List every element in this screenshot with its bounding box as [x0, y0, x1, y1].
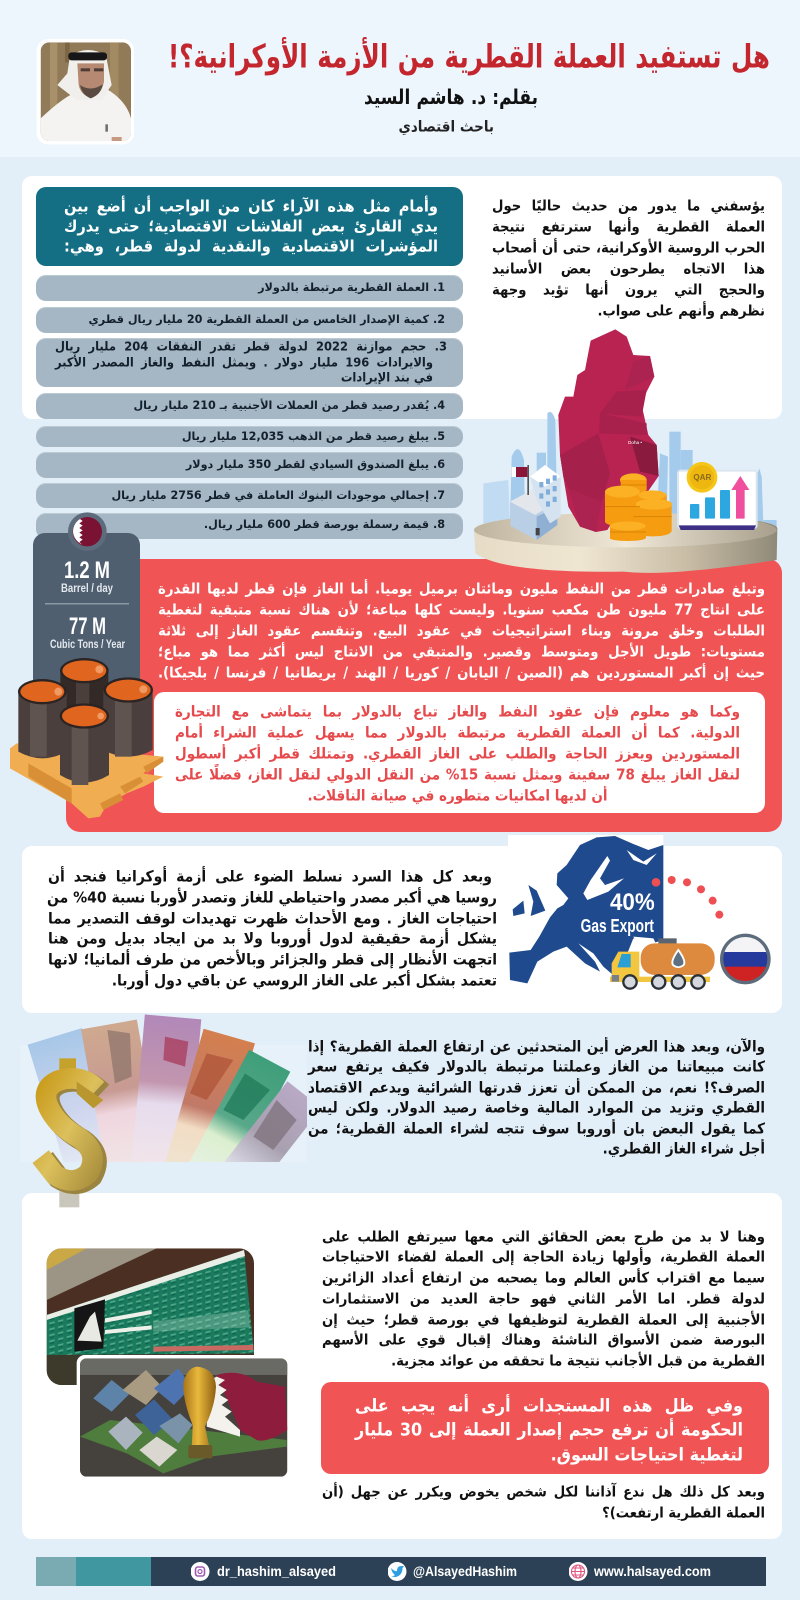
intro paragraph: يؤسفني ما يدور من حديث حاليًا حول	[492, 198, 765, 215]
stats column	[33, 533, 140, 748]
recommendation text: الحكومة أن ترفع حجم إصدار العملة إلى 30 مليار	[355, 1419, 743, 1440]
currency paragraph: القطري وتزيد من الموارد المالية وخاصة رصيد الدولار. ولكن ليس	[308, 1099, 765, 1117]
Europe paragraph: وبعد كل هذا السرد نسلط الضوء على أزمة أوكرانيا فنجد أن	[48, 868, 492, 886]
currency paragraph: كما يقول البعض بان أوروبا سوف تتجه لشراء العملة القطرية؛ من	[308, 1120, 765, 1138]
instagram handle	[191, 1562, 336, 1581]
currency paragraph: أجل شراء الغاز القطري.	[603, 1141, 765, 1158]
item 3 text	[54, 338, 447, 385]
illustration: banknote fan and dollar sign	[28, 1014, 307, 1208]
callout text	[64, 196, 438, 256]
illustration: Europe map, tanker and Russia flag	[508, 835, 771, 990]
item 4	[36, 393, 463, 419]
item 3	[36, 338, 463, 387]
photos: stock exchange board and World Cup	[46, 1248, 288, 1477]
closing question: وبعد كل ذلك هل ندع آذاننا لكل شخص يخوض ويكرر عن جهل (أن	[322, 1484, 765, 1501]
illustration: oil barrels on pallet	[10, 658, 164, 818]
item 6	[36, 452, 463, 478]
illustration: Qatar map on platform: Doha •	[628, 440, 642, 445]
stat: barrels per day	[61, 557, 113, 595]
exports paragraph	[158, 579, 765, 682]
illustration: Qatar map on platform: QAR	[693, 473, 712, 482]
portrait of the author	[36, 39, 134, 144]
intro paragraph: هذا الاتجاه يطرحون بعض الأسانيد	[492, 261, 765, 278]
currency paragraph: والآن، وبعد هذا العرض أين المتحدثين عن ارتفاع العملة القطرية؟ إذا	[308, 1038, 765, 1055]
facts paragraph: لدولة قطر. اما الأمر الثاني فهو حاجة العديد من الاستثمارات	[322, 1291, 765, 1308]
item 2	[36, 307, 463, 333]
exports paragraph: الطلبات وخلق مرونة وبناء استراتيجيات في عقود البيع. وتنقسم عقود الغاز إلى ثلاثة	[158, 623, 765, 639]
facts paragraph: سيما مع اقتراب كأس العالم وما يصحبه من ارتفاع أعداد الزائرين	[322, 1270, 765, 1287]
facts paragraph: القطرية من قبل الأجانب نتيجة ما تحققه من عوائد مجزية.	[391, 1353, 765, 1370]
currency paragraph: كانت مبيعاتنا من الغاز وعملتنا مرتبطة بالدولار فكيف يرتفع سعر	[308, 1058, 765, 1076]
twitter handle	[388, 1562, 517, 1581]
author byline: بقلم: د. هاشم السيد	[364, 86, 538, 110]
facts paragraph	[322, 1229, 765, 1370]
item 3 text: والايرادات 196 مليار دولار . ويمثل النفط والغاز المصدر الأكبر	[55, 354, 433, 369]
icon: Qatar flag circle	[68, 512, 107, 551]
header background	[0, 0, 800, 157]
item 5	[36, 426, 463, 447]
stat: barrels per day: 1.2 M	[64, 557, 110, 584]
illustration: Europe map, tanker and Russia flag: 40%	[610, 889, 655, 916]
facts paragraph: الأجنبية إلى العملة القطرية لتوظيفها في بورصة قطر؛ حيث إن	[322, 1312, 765, 1328]
intro paragraph: الحرب الروسية الأوكرانية، حتى أن أصحاب	[492, 240, 765, 257]
list of economic indicators	[36, 275, 463, 539]
item 3 text: 3. حجم موازنة 2022 لدولة قطر تقدر النفقات 204 مليار ريال	[55, 338, 447, 354]
instagram handle: dr_hashim_alsayed	[217, 1563, 336, 1579]
stat: barrels per day: Barrel / day	[61, 581, 113, 595]
item 1: 1. العملة القطرية مرتبطة بالدولار	[258, 281, 445, 294]
white contracts box	[154, 692, 765, 813]
title: هل تستفيد العملة القطرية من الأزمة الأوكرانية؟!	[168, 37, 770, 75]
item 6: 6. يبلغ الصندوق السيادي لقطر 350 مليار دولار	[186, 458, 445, 471]
Europe paragraph: روسيا هي أكبر مصدر واحتياطي للغاز وتصدر لأوربا نسبة 40% من	[47, 889, 497, 907]
callout text: يدي القارئ بعض الفلاشات الاقتصادية؛ حتى يدرك	[64, 217, 438, 236]
intro paragraph	[492, 198, 765, 320]
Europe paragraph: اتجهت الأنظار إلى قطر والجزائر وبالأخص من طرف ألمانيا؛ لانها	[48, 951, 497, 969]
panel: Europe gas crisis	[22, 846, 782, 1013]
Europe paragraph: تعتمد بشكل أكبر على الغاز الروسي عن باقي دول أوربا.	[112, 972, 497, 990]
contracts text: أن لديها امكانيات متطوره في صيانة الناقلات.	[307, 787, 608, 805]
recommendation text	[354, 1394, 743, 1465]
item 2: 2. كمية الإصدار الخامس من العملة القطرية 20 مليار ريال قطري	[88, 313, 445, 326]
illustration: Qatar map on platform	[474, 329, 778, 573]
author role: باحث اقتصادي	[398, 118, 494, 136]
item 7	[36, 483, 463, 508]
footer colour blocks	[36, 1557, 151, 1586]
intro paragraph: نظرهم وأنهم على صواب.	[597, 303, 765, 320]
footer bar	[36, 1557, 766, 1586]
contracts text: لنقل الغاز يبلغ 78 سفينة ويمثل نسبة 15% من النقل الدولي لنقل الغاز، فضلًا على	[175, 766, 740, 784]
facts paragraph: البورصة ضمن الأسواق الناشئة وهناك إقبال قوي على الأسهم	[322, 1333, 765, 1349]
exports paragraph: وتبلغ صادرات قطر من النفط مليون ومائتان برميل يوميا. أما الغاز فإن قطر لديها القدرة	[158, 581, 765, 598]
intro paragraph: العملة القطرية وأنها سترتفع نتيجة	[492, 219, 765, 236]
contracts text: وكما هو معلوم فإن عقود النفط والغاز تباع بالدولار بما يتماشى مع التجارة	[175, 703, 740, 721]
contracts text	[175, 703, 740, 805]
item 1	[36, 275, 463, 301]
item 5: 5. يبلغ رصيد قطر من الذهب 12,035 مليار ريال	[182, 430, 445, 443]
currency paragraph	[307, 1037, 765, 1158]
item 8: 8. قيمة رسملة بورصة قطر 600 مليار ريال.	[204, 518, 445, 531]
closing question: العملة القطرية ارتفعت)؟	[602, 1505, 765, 1521]
exports paragraph: على انتاج 77 مليون طن مكعب سنويا. وليست كلها مباعة؛ لأن هناك نسبة متبقية لتغطية	[158, 602, 765, 619]
Europe paragraph: يشكل أزمة حقيقية لدول أوروبا ولا بد من ايجاد بديل ومن هنا	[48, 931, 497, 948]
Europe paragraph: احتياجات الغاز . ومع الأحداث ظهرت تهديدات لوقف التصدير مما	[48, 910, 497, 927]
exports paragraph: مستويات: طويل الأجل ومتوسط وقصير. والمتبقي من الانتاج ليس أكثر مما هو مباع؛	[158, 644, 765, 660]
stat: cubic tons per year	[45, 603, 129, 651]
item 4: 4. يُقدر رصيد قطر من العملات الأجنبية بـ 210 مليار ريال	[133, 399, 445, 412]
exports paragraph: حيث إن أكبر المستوردين هم (الصين / اليابان / كوريا / الهند / بريطانيا / فرنسا / بلجيكا).	[158, 665, 765, 681]
teal callout	[36, 187, 463, 266]
panel: intro	[22, 176, 782, 419]
callout text: المؤشرات الاقتصادية والنقدية لدولة قطر، وهي:	[64, 237, 438, 256]
website	[569, 1562, 711, 1581]
red recommendation box	[321, 1382, 769, 1474]
Europe paragraph	[47, 866, 497, 990]
callout text: وأمام مثل هذه الآراء كان من الواجب أن أضع بين	[64, 197, 438, 216]
currency paragraph: الصرف؟! نعم، من الممكن أن تعزز قدرتها الشرائية ويدعم الاقتصاد	[308, 1079, 765, 1096]
item 3 text: في بند الإيرادات	[341, 369, 433, 385]
illustration: Europe map, tanker and Russia flag: Gas Export	[581, 916, 654, 936]
recommendation text: لتغطية احتياجات السوق.	[551, 1444, 743, 1465]
facts paragraph: وهنا لا بد من طرح بعض الحقائق التي معها سيرتفع الطلب على	[322, 1229, 765, 1245]
contracts text: المستوردين ويعزز الحاجة والطلب على الغاز القطري. وتمتلك قطر أكبر أسطول	[175, 745, 740, 763]
contracts text: الدولية. كما أن العملة القطرية مرتبطة بالدولار مما يسهل عملية الشراء أمام	[175, 724, 740, 742]
intro paragraph: والحجج التي يرون أنها تؤيد وجهة	[492, 282, 765, 299]
recommendation text: وفي ظل هذه المستجدات أرى أنه يجب على	[355, 1394, 743, 1415]
item 7: 7. إجمالي موجودات البنوك العاملة في قطر 2756 مليار ريال	[111, 489, 445, 502]
item 8	[36, 513, 463, 539]
stat: cubic tons per year: 77 M	[69, 613, 106, 640]
closing question	[322, 1482, 765, 1521]
panel: oil and gas exports	[66, 559, 782, 832]
panel: facts and recommendation	[22, 1193, 782, 1539]
facts paragraph: العملة القطرية، وأولها زيادة الحاجة إلى العملة لقضاء الاحتياجات	[322, 1249, 765, 1266]
